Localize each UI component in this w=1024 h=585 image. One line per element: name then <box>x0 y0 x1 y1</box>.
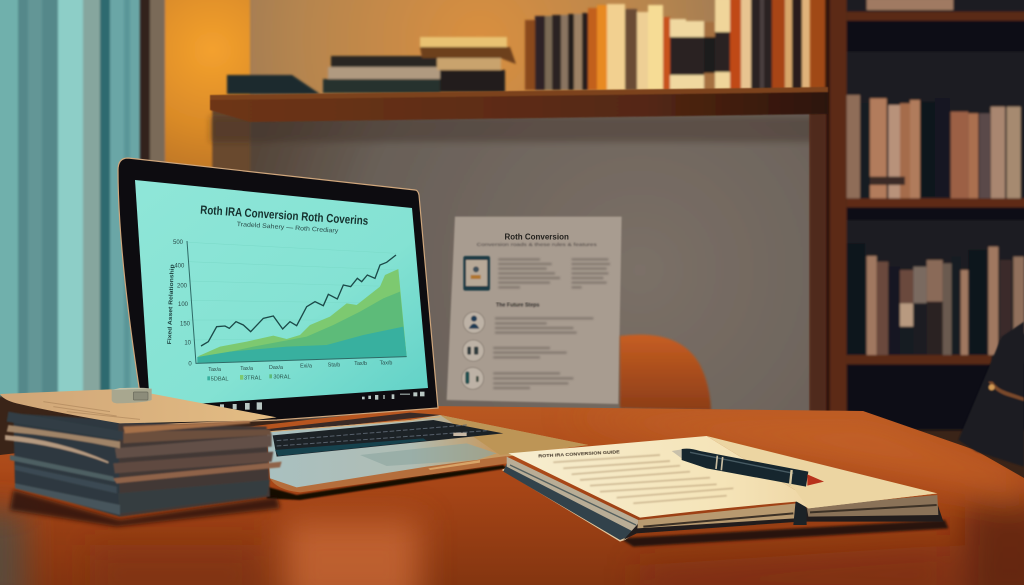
chart legend: 3TRAL <box>244 376 262 382</box>
printed lines <box>43 402 140 419</box>
poster heading: Roth Conversion <box>505 232 569 241</box>
window with teal curtains <box>0 0 144 396</box>
y axis labels: 150 <box>180 321 191 327</box>
area series: light green <box>197 269 407 357</box>
left wall corner <box>140 0 253 416</box>
lower shelf books <box>847 243 1024 355</box>
y axis labels: 500 <box>173 240 184 246</box>
laptop <box>118 158 588 500</box>
x axis labels: Tax/a <box>208 367 221 373</box>
y axis labels: 200 <box>177 283 188 289</box>
chart on screen <box>167 203 425 410</box>
screen display <box>135 180 428 407</box>
black flat box <box>227 75 320 94</box>
area series: teal <box>197 327 407 363</box>
icon: phone <box>462 367 484 389</box>
page heading: ROTH IRA CONVERSION GUIDE <box>538 449 621 460</box>
back wall <box>210 0 840 420</box>
upper wall shelf <box>210 87 828 122</box>
open pages <box>508 436 937 518</box>
book shadow <box>620 520 948 547</box>
y axis title: Fixed Asset Relationship <box>167 264 176 344</box>
wall poster: Roth Conversion <box>447 217 622 404</box>
folder layers <box>5 412 282 517</box>
base shadow <box>267 465 507 500</box>
top shelf book edges <box>867 0 953 10</box>
poster board <box>447 217 622 404</box>
icon: people <box>463 340 484 361</box>
y axis labels: 400 <box>174 263 185 269</box>
post below upper shelf <box>810 112 826 412</box>
icon: person <box>463 312 485 333</box>
laptop base <box>260 413 588 500</box>
upper shelf books <box>227 0 828 94</box>
screen bezel <box>118 158 438 425</box>
book cover edges <box>502 457 943 542</box>
open book with pen <box>502 436 948 547</box>
y axis labels: 0 <box>188 362 192 368</box>
icon: tablet <box>463 256 490 291</box>
chart legend <box>207 374 291 383</box>
x axis labels: Dax/a <box>269 365 283 371</box>
x axis labels: Tax/a <box>240 366 253 372</box>
wood reflections <box>0 414 1024 585</box>
chart legend: 5DBAL <box>211 377 229 383</box>
taskbar icons <box>220 392 425 410</box>
x axis labels: Tax/b <box>354 361 367 367</box>
stack of flat books <box>323 37 516 93</box>
right bookcase <box>810 0 1024 430</box>
poster text lines <box>493 259 610 388</box>
poster subheading: Conversion roads & these rules & features <box>477 242 597 248</box>
dark leather chair <box>958 322 1024 467</box>
page text lines <box>553 455 733 503</box>
grid lines <box>188 242 405 340</box>
x axis labels: Tax/b <box>380 360 392 366</box>
usb drive <box>112 388 152 403</box>
orange office chair <box>620 335 711 410</box>
poster section heading: The Future Steps <box>496 303 540 309</box>
paper stack <box>0 388 282 527</box>
axes <box>187 241 407 363</box>
chart title: Roth IRA Conversion Roth Coverins <box>200 203 369 228</box>
x axis labels <box>208 360 392 373</box>
hinge strip <box>260 413 442 433</box>
desk surface <box>0 400 1024 585</box>
x axis labels: Sta/b <box>328 362 340 368</box>
y axis labels <box>173 240 192 368</box>
line series <box>201 255 396 346</box>
y axis labels: 10 <box>184 341 192 347</box>
pen <box>672 449 824 487</box>
front lip <box>270 456 507 492</box>
chart legend: 30RAL <box>273 374 291 380</box>
top paper sheet <box>0 389 277 423</box>
area series: mid green <box>197 292 407 359</box>
trackpad <box>360 443 497 466</box>
y axis labels: 100 <box>178 302 189 308</box>
chart subtitle: Tradeld Sahery — Roth Crediary <box>237 221 339 235</box>
stack shadow <box>10 490 280 527</box>
x axis labels: Exi/a <box>300 364 312 370</box>
shelf boards <box>845 12 1024 364</box>
base deck <box>267 415 588 488</box>
cabinet uprights <box>810 0 847 413</box>
upright books row <box>525 0 828 90</box>
middle shelf books <box>847 95 1021 198</box>
keyboard <box>273 420 503 457</box>
